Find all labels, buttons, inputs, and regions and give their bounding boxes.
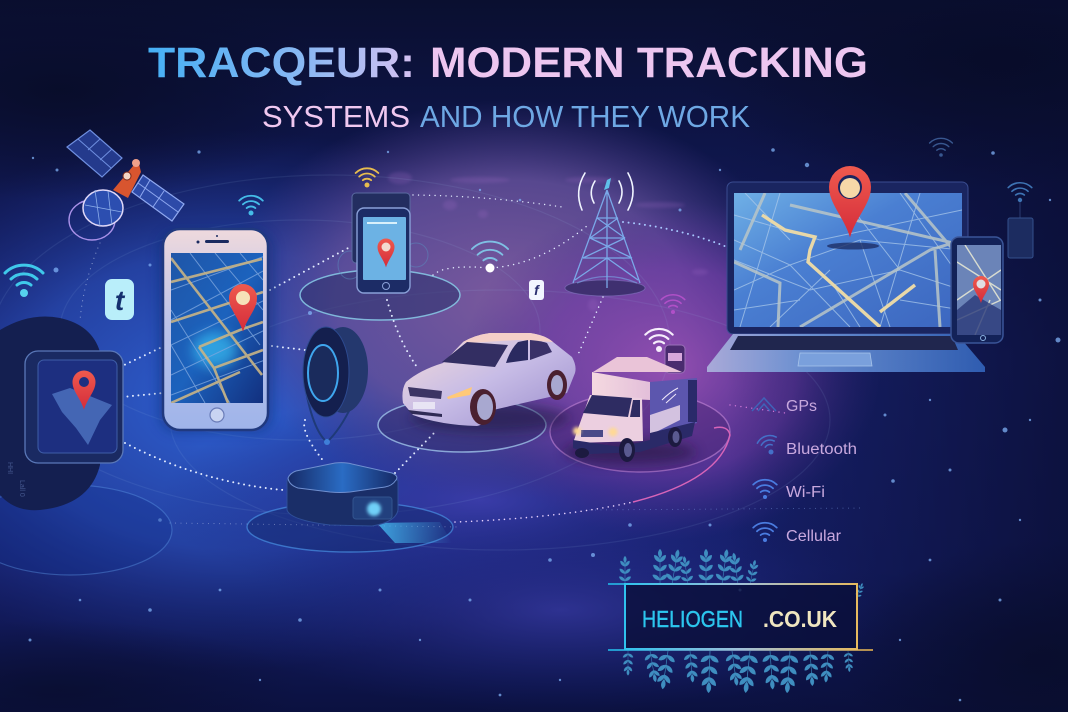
icon: wifi white (645, 329, 673, 352)
phone: small by laptop (951, 237, 1003, 343)
watch map (52, 388, 112, 445)
icon: app tile small: f (534, 282, 540, 298)
icon: wifi above phone (239, 196, 263, 216)
watch strap text: HHI (6, 462, 13, 474)
car windows (442, 342, 508, 367)
hub device (287, 463, 452, 543)
tracker: ring device (303, 327, 368, 445)
legend: Cellular: Cellular (786, 528, 841, 545)
laptop touchpad (798, 353, 872, 366)
laptop (707, 166, 985, 372)
network connection lines (80, 195, 863, 527)
icon: app tile large: t (115, 285, 126, 316)
legend: Wi-Fi (753, 480, 825, 501)
cell tower (573, 173, 640, 288)
legend: GPS: GPs (786, 398, 817, 415)
icon: wifi purple (661, 295, 685, 314)
decorative purple haze (388, 172, 708, 311)
phone map (171, 253, 265, 403)
subtitle: AND HOW THEY WORK (420, 99, 750, 134)
logo foliage top (618, 548, 866, 599)
logo foliage bottom (622, 650, 854, 694)
phone pin (229, 284, 257, 332)
laptop keyboard (730, 336, 958, 350)
truck wheels (575, 448, 589, 458)
car wheels (547, 370, 567, 400)
laptop pin (829, 166, 871, 237)
icon: wifi centre (472, 242, 508, 272)
ground ring: car (378, 398, 546, 452)
ground ring: tower (565, 280, 645, 296)
laptop pin shadow (827, 242, 879, 250)
watch (0, 316, 123, 510)
phone: large with map (159, 229, 273, 432)
title: MODERN TRACKING (430, 39, 868, 87)
icon: app tile small (529, 280, 544, 300)
subtitle (262, 99, 750, 134)
watch strap (0, 316, 100, 510)
legend: GPS (752, 398, 817, 415)
pink connector arc (633, 427, 730, 502)
icon: wifi right (1008, 183, 1032, 218)
watch pin (72, 370, 96, 410)
device: small tracker right (1008, 218, 1033, 258)
middle phone pin (378, 238, 394, 267)
decorative starfield (28, 148, 1060, 701)
tower signal arcs (579, 173, 633, 210)
watch strap text (6, 462, 25, 497)
ground ring: watch (0, 485, 172, 575)
legend: Bluetooth: Bluetooth (786, 441, 857, 458)
title (148, 39, 868, 87)
laptop map (734, 193, 962, 327)
car (402, 333, 576, 432)
watch screen (38, 360, 117, 453)
watch strap text: Lall 0 (18, 480, 25, 497)
ground ring: hub (247, 502, 453, 552)
icon: satellite (67, 130, 184, 240)
icon: wifi left (5, 265, 43, 297)
laptop base (707, 334, 985, 372)
watch case (25, 351, 123, 463)
legend: Bluetooth (756, 433, 857, 458)
logo domain: .CO.UK (763, 606, 837, 632)
car front details (408, 387, 442, 399)
icon: wifi yellow (356, 168, 378, 188)
ground ring: middle phone (300, 270, 460, 320)
legend: Cellular (753, 523, 841, 545)
icon: app tile large (105, 279, 134, 320)
phone: middle (338, 193, 428, 293)
logo box (608, 584, 873, 650)
ground ring: truck (550, 392, 730, 472)
icon: wifi top right small (930, 138, 952, 157)
truck (564, 345, 697, 464)
decorative orbit rings (0, 175, 830, 550)
subtitle: SYSTEMS (262, 99, 410, 134)
title: TRACQEUR: (148, 39, 415, 87)
legend: Wi-Fi: Wi-Fi (786, 484, 825, 501)
phone home button (210, 408, 224, 422)
logo name: HELIOGEN (642, 606, 743, 632)
